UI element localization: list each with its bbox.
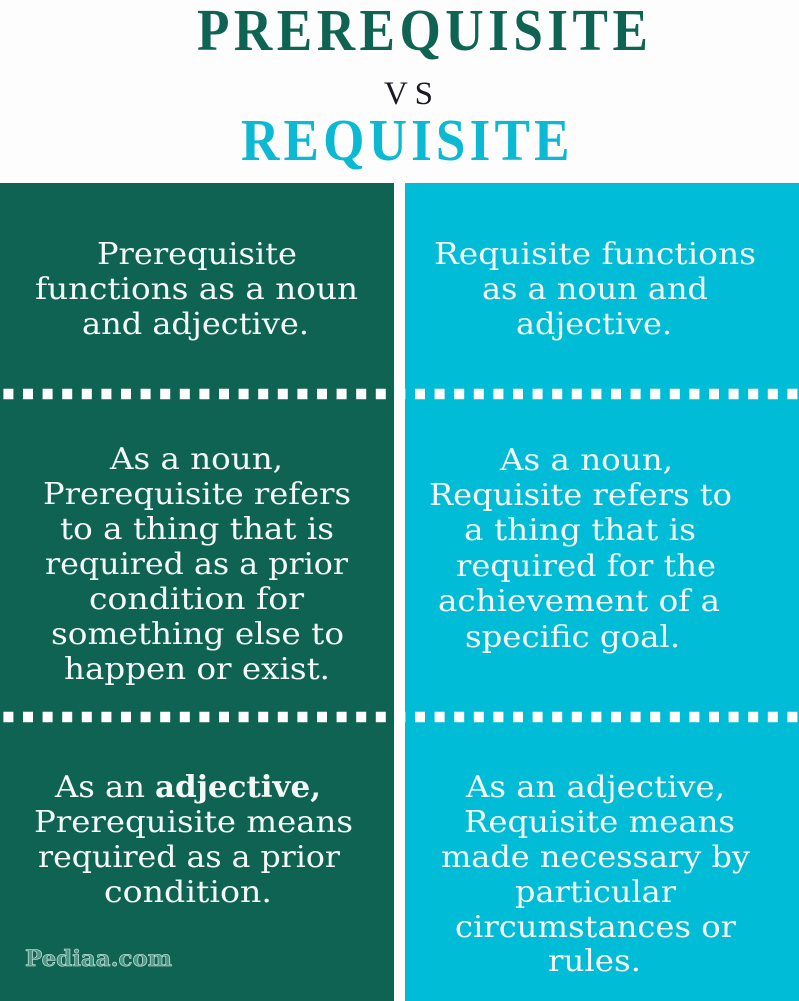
text: requisite row 2: a thing that is [464,513,696,548]
dotted divider: upper [3,389,799,399]
text: requisite row 3 [441,770,750,979]
text: prerequisite row 2: As a noun, [109,442,283,477]
text: prerequisite row 2: Prerequisite refers [43,477,351,512]
title: Requisite: REQUISITE [241,108,570,174]
logo: Pediaa.com: Pediaa.com [25,946,172,972]
text: prerequisite row 3: As an [54,770,145,805]
text: requisite row 3: rules. [548,944,641,979]
text: prerequisite row 3 [34,770,353,910]
text: prerequisite row 2: condition for [89,582,305,617]
text: prerequisite row 1: functions as a noun [35,272,358,307]
text: prerequisite row 3: adjective, [155,770,321,805]
text: requisite row 2: achievement of a [438,584,720,619]
text: requisite row 2 [429,443,732,655]
text: requisite row 2: required for the [456,549,716,584]
dotted divider: lower [3,712,799,722]
text: prerequisite row 1: and adjective. [82,307,309,342]
text: requisite row 3: circumstances or [455,910,737,945]
text: requisite row 1: as a noun and [482,272,708,307]
text: prerequisite row 1 [35,237,358,342]
text: requisite row 1 [434,237,756,342]
text: prerequisite row 3: required as a prior [38,840,341,875]
text: prerequisite row 2: something else to [51,617,344,652]
panel: prerequisite column [0,183,394,1001]
text: prerequisite row 3: condition. [104,875,272,910]
text: prerequisite row 2 [43,442,351,687]
text: requisite row 2: specific goal. [465,620,680,655]
text: prerequisite row 3: Prerequisite means [34,805,353,840]
text: prerequisite row 2: happen or exist. [64,652,330,687]
text: requisite row 1: Requisite functions [434,237,756,272]
title: Prerequisite: PREREQUISITE [197,0,648,64]
title: vs: VS [384,76,433,112]
text: prerequisite row 2: required as a prior [45,547,349,582]
text: requisite row 2: As a noun, [499,443,673,478]
text: prerequisite row 1: Prerequisite [97,237,297,272]
text: requisite row 3: As an adjective, [465,770,725,805]
text: requisite row 3: Requisite means [464,805,735,840]
text: requisite row 3: made necessary by [441,840,750,875]
panel: requisite column [405,183,799,1001]
text: requisite row 3: particular [515,875,677,910]
text: requisite row 1: adjective. [516,307,672,342]
text: requisite row 2: Requisite refers to [429,478,732,513]
text: prerequisite row 2: to a thing that is [60,512,334,547]
